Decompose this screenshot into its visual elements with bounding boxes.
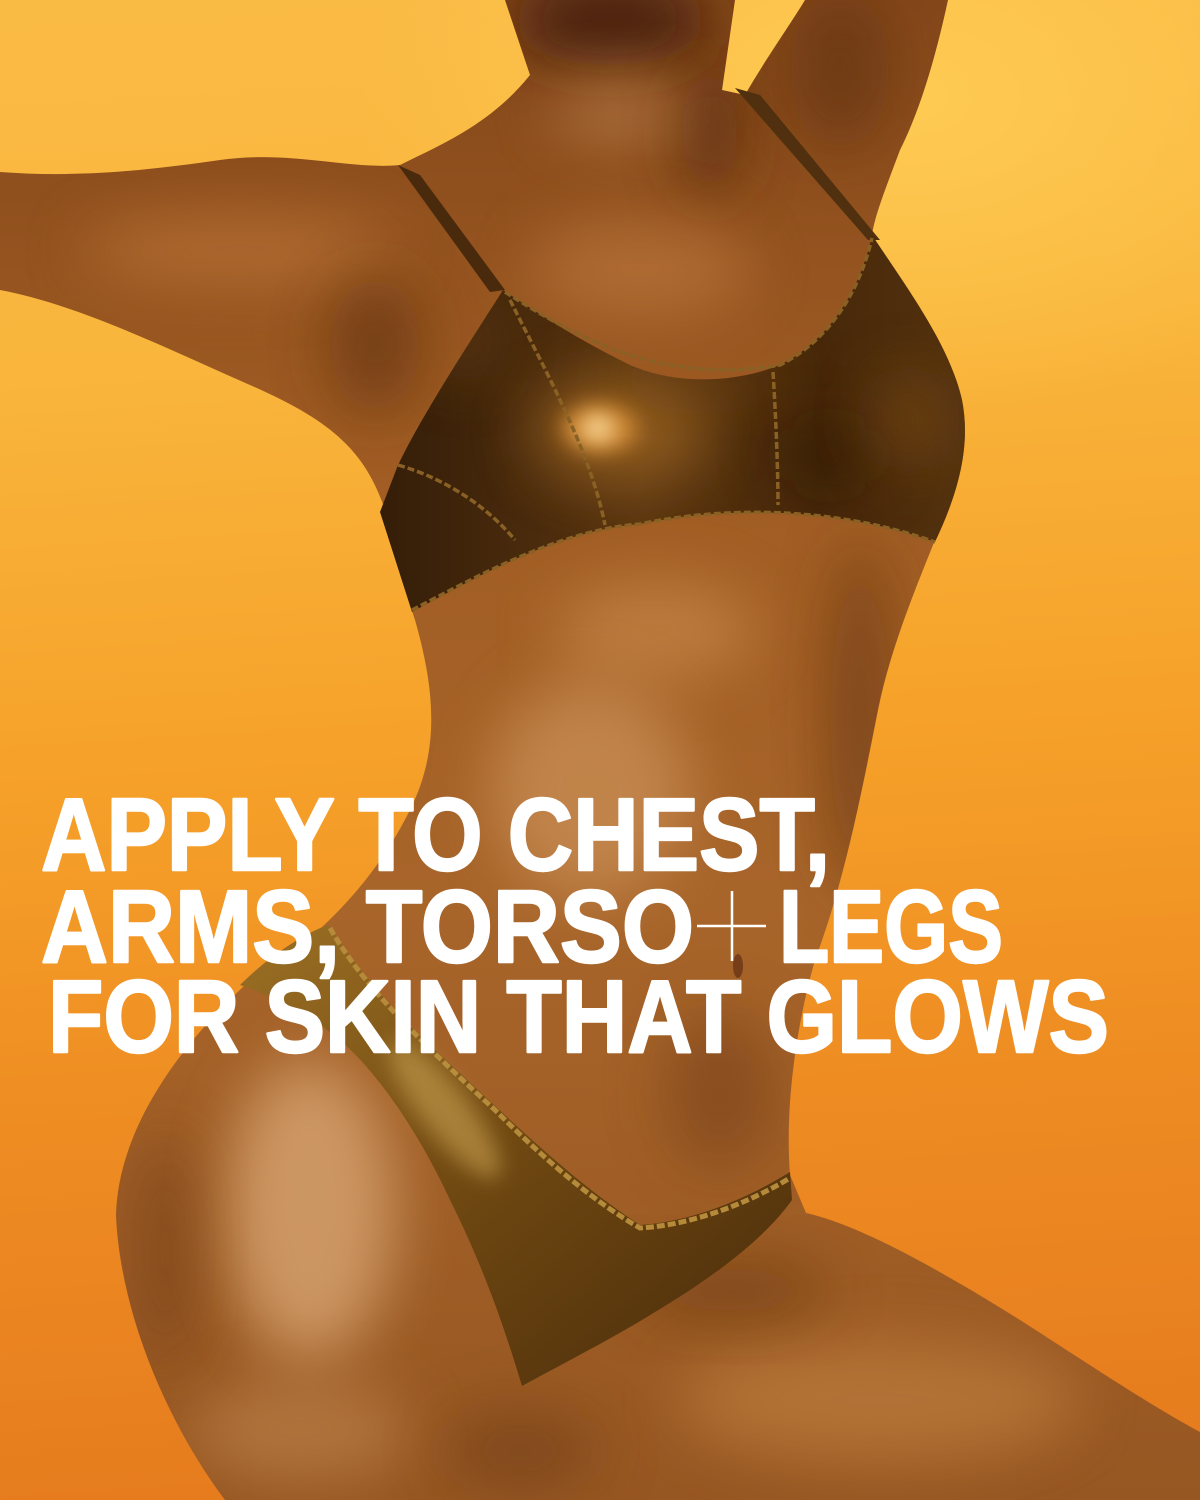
headline: APPLY TO CHEST,	[41, 777, 830, 892]
headline	[41, 777, 1109, 1074]
garment highlights	[435, 300, 945, 485]
right strap	[735, 88, 880, 240]
garment sheen	[374, 1028, 516, 1192]
seams	[398, 238, 935, 610]
garment panel	[380, 235, 965, 612]
navel	[733, 954, 743, 978]
metallic bottom	[240, 925, 792, 1386]
left strap	[398, 165, 505, 292]
headline: LEGS	[779, 869, 1003, 984]
metallic top	[380, 88, 965, 612]
headline: ARMS, TORSO	[41, 869, 694, 984]
waistband stitching	[330, 928, 790, 1228]
plus sign	[697, 891, 766, 961]
